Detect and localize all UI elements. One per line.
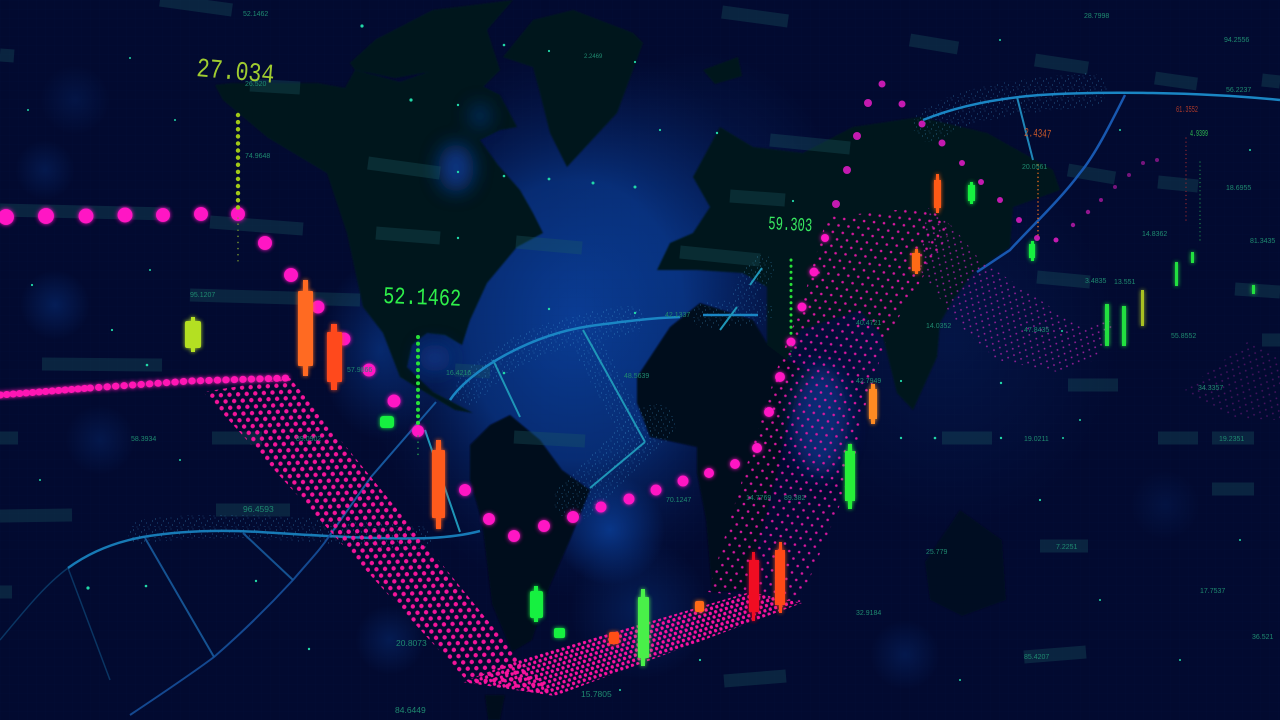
label 27.034: 27.034 (195, 55, 276, 92)
value labels: small: 3.4835 (1085, 278, 1107, 285)
helix: med stub (720, 268, 762, 330)
label 4.9399: 4.9399 (1190, 129, 1208, 139)
continent: North America (215, 68, 543, 413)
value labels: small: 28.7998 (1084, 13, 1109, 20)
dotted leader lines (238, 115, 1200, 460)
pink marker dots: near (0, 207, 829, 542)
candlesticks: green and lime (185, 182, 1255, 666)
value labels: small: 57.9866 (347, 367, 372, 374)
continent: South America (470, 415, 590, 652)
continent: Iceland and Svalbard (703, 57, 742, 84)
helix: rising strand (330, 402, 436, 535)
label 61.3552: 61.3552 (1176, 105, 1198, 115)
value labels: small: 14.8362 (1142, 231, 1167, 238)
spray: mediterranean (705, 268, 762, 315)
label 59.303: 59.303 (768, 213, 813, 237)
candlesticks: orange and red (298, 174, 941, 644)
bay patch (470, 104, 490, 128)
spray: centre right (575, 425, 655, 500)
lake patch (438, 144, 474, 192)
helix: lower left faint (0, 568, 110, 680)
value labels: small: 85.4207 (1024, 654, 1049, 661)
helix: upper right (923, 93, 1280, 120)
value labels: small: 7.2251 (1056, 544, 1078, 551)
helix: lower left main (68, 531, 480, 568)
value labels: small: 20.0561 (1022, 164, 1047, 171)
value labels: small: 84.6449 (395, 705, 426, 715)
value labels: small: 89.0902 (296, 436, 321, 443)
value labels: small: 89.382 (784, 495, 806, 502)
value labels: small: 34.3357 (1198, 385, 1223, 392)
gulf patch (419, 344, 451, 372)
value labels: small: 70.1247 (666, 497, 691, 504)
helix: lower strand (130, 535, 330, 715)
value labels: small: 15.7805 (581, 689, 612, 699)
continent: Eurasia (657, 117, 1060, 410)
ribbon: far right dotted band (1185, 340, 1280, 420)
label 2.4347: 2.4347 (1024, 126, 1052, 142)
value labels: small: 25.779 (926, 549, 948, 556)
value labels: small: 95.1207 (190, 292, 215, 299)
ribbon: rising dotted band (708, 207, 953, 602)
value labels: small: 56.2237 (1226, 87, 1251, 94)
value labels: small: 19.2351 (1219, 436, 1244, 443)
continent: Arctic islands (350, 0, 513, 92)
value labels: small: 52.1462 (243, 11, 268, 18)
particle spray (140, 90, 1090, 538)
value labels: small: 48.5639 (624, 373, 649, 380)
ribbon: far dotted band (920, 207, 1115, 373)
value labels: small: 96.4593 (243, 504, 274, 514)
spray: upper right (930, 90, 1090, 125)
label 52.1462: 52.1462 (383, 284, 462, 314)
value labels: large (195, 55, 1208, 314)
value labels: small: 94.2556 (1224, 37, 1249, 44)
helix: right strand (977, 95, 1125, 272)
value labels: small: 14.0352 (926, 323, 951, 330)
ribbon: diagonal dotted band (203, 378, 556, 696)
world map (215, 0, 1060, 720)
ribbon: lower dotted band (462, 592, 802, 696)
value labels: small: 74.9648 (245, 153, 270, 160)
value labels: small: 47.8435 (1024, 327, 1049, 334)
helix: rib right (1017, 97, 1033, 160)
continent: Africa (637, 303, 813, 592)
spray: rib (590, 350, 640, 440)
pink marker dots: far (832, 80, 1159, 242)
helix: ribs lower (145, 533, 293, 657)
value labels: small: 17.7537 (1200, 588, 1225, 595)
helix: centre arc (450, 315, 758, 400)
value labels: small: 26.520 (245, 81, 267, 88)
value labels: small: 13.551 (1114, 279, 1136, 286)
ribbon: beaded line (0, 378, 290, 395)
value labels: small: 58.3934 (131, 436, 156, 443)
value labels: small: 2.2469 (584, 54, 603, 60)
inland water glows (419, 104, 848, 475)
value labels: small: 32.9184 (856, 610, 881, 617)
sea patch (792, 365, 848, 475)
value labels: small: 42.1337 (665, 312, 690, 319)
continent: Australia (925, 510, 1006, 616)
value labels: small: 16.4216 (446, 370, 471, 377)
value labels: small: 18.6955 (1226, 185, 1251, 192)
value labels: small: 40.4721 (856, 320, 881, 327)
spray: lower helix (140, 526, 420, 538)
value labels: small: 20.8073 (396, 638, 427, 648)
value labels: small: 55.8552 (1171, 333, 1196, 340)
value labels: small: 14.7769 (746, 495, 771, 502)
continent: Greenland (503, 10, 643, 167)
value labels: small: 42.7949 (856, 378, 881, 385)
value labels: small: 36.521 (1252, 634, 1274, 641)
value labels: small: 19.0211 (1024, 436, 1049, 443)
value labels: small: 81.3435 (1250, 238, 1275, 245)
continent: Tierra del Fuego (485, 695, 505, 720)
spray: mid arc (470, 320, 630, 390)
helix: ribs centre (425, 330, 645, 532)
